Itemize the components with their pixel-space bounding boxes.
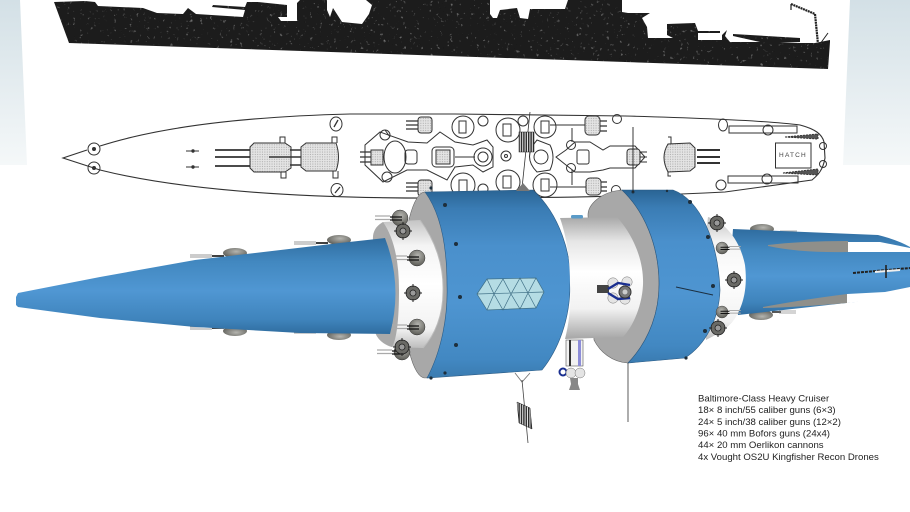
stern white cutouts xyxy=(847,242,910,303)
aft main turret xyxy=(664,137,720,176)
spec line 4: 96× 40 mm Bofors guns (24x4) xyxy=(698,428,830,440)
collar guns rear xyxy=(708,214,743,337)
spacecraft: forward drum xyxy=(425,190,570,378)
forward superstructure detail xyxy=(360,130,492,182)
side-view ship silhouette xyxy=(54,0,830,69)
gun rings fore xyxy=(330,117,343,196)
bow rings xyxy=(88,143,100,174)
background panel left xyxy=(0,0,27,165)
hull dots rear drum xyxy=(632,190,715,360)
hex solar panel xyxy=(477,278,544,310)
lower module xyxy=(560,340,585,390)
rear drum antenna line xyxy=(676,287,713,295)
spec line 5: 44× 20 mm Oerlikon cannons xyxy=(698,440,824,451)
aft deck house xyxy=(534,125,645,187)
collar guns forward xyxy=(375,210,425,360)
rear flange xyxy=(588,190,659,363)
hull dots forward drum xyxy=(429,186,462,380)
spec text block xyxy=(698,394,879,463)
stern cone xyxy=(730,224,910,320)
lower antenna xyxy=(627,363,629,422)
top solar panel with mast xyxy=(516,112,534,191)
forward turret 1 xyxy=(215,137,291,178)
spec line 3: 24× 5 inch/38 caliber guns (12×2) xyxy=(698,417,841,428)
hull outline xyxy=(63,114,825,198)
gun tubs xyxy=(451,116,557,197)
background panel right xyxy=(843,0,910,165)
spec line 1: Baltimore-Class Heavy Cruiser xyxy=(698,394,830,404)
aft small turret xyxy=(627,149,647,165)
lower solar panel with mast xyxy=(515,373,532,443)
spec line 6: 4x Vought OS2U Kingfisher Recon Drones xyxy=(698,452,879,463)
hatch box: HATCH xyxy=(779,152,807,159)
top-view deck blueprint xyxy=(63,114,826,198)
5 inch mounts fore xyxy=(406,117,432,196)
forward collar xyxy=(372,220,443,348)
spec line 2: 18× 8 inch/55 caliber guns (6×3) xyxy=(698,405,836,416)
central white cylinder xyxy=(560,217,643,339)
hatch box xyxy=(776,143,811,168)
aft superstructure xyxy=(530,140,553,172)
stern rails xyxy=(728,125,818,184)
rear collar xyxy=(700,217,746,340)
crane xyxy=(791,4,828,44)
rear drum xyxy=(622,190,720,363)
cylinder top fitting xyxy=(571,215,583,218)
5 inch mounts aft xyxy=(585,116,607,195)
bow markers xyxy=(186,150,199,168)
aft rings xyxy=(612,114,826,194)
stern grey rims xyxy=(763,241,848,308)
forward superstructure xyxy=(365,132,493,182)
forward turret 2 xyxy=(269,137,338,178)
top antenna xyxy=(632,127,634,192)
spacecraft: forward flange xyxy=(402,192,448,378)
spacecraft: bow cone with humps xyxy=(16,235,395,340)
recon drone on stern xyxy=(853,265,910,278)
spacecraft module on cylinder xyxy=(597,277,632,304)
